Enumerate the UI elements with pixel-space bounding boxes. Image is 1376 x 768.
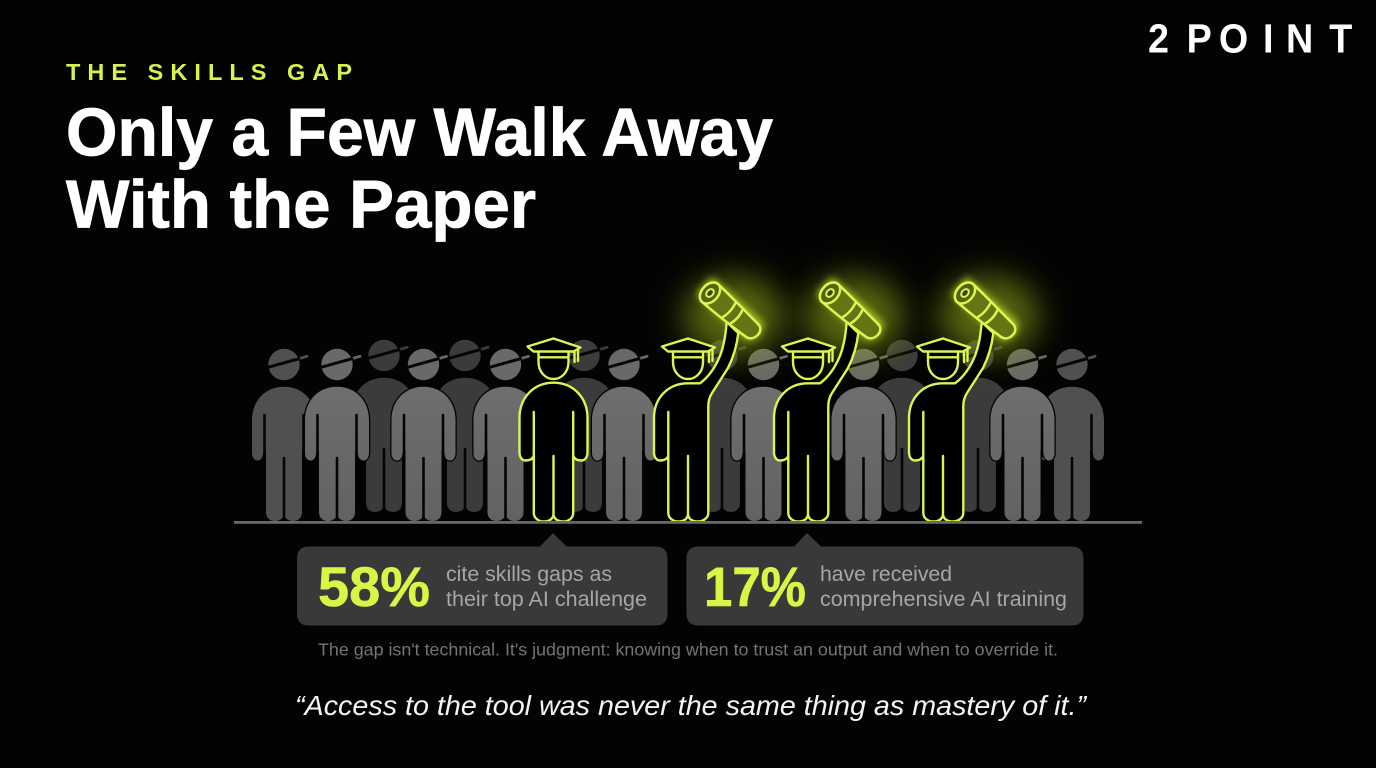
callout: 17 percent: 17% [704,555,806,618]
back row of dim figures [352,340,1010,512]
eyebrow heading: THE SKILLS GAP [66,59,352,85]
callout: 17 percent: have received [820,563,952,586]
title [66,94,773,242]
callout: 58 percent: cite skills gaps as [446,563,612,586]
callout: 58 percent: their top AI challenge [446,588,647,611]
title: With the Paper [66,166,536,242]
callout: 58 percent [297,533,668,626]
neon graduate raising diploma 3 [909,276,1039,522]
neon graduate raising diploma 2 [774,276,904,522]
callout: 17 percent [686,533,1084,626]
callout: 17 percent: comprehensive AI training [820,588,1067,611]
middle row of grey figures [252,349,1104,521]
neon graduate without diploma [520,338,588,522]
ground line [234,521,1142,524]
front row of grey figures [305,349,1054,521]
chart: crowd of graduates [234,276,1142,524]
logo: 2POINT [1148,16,1352,62]
quote: “Access to the tool was never the same thing as mastery of it.” [295,690,1088,721]
explanatory note: The gap isn't technical. It's judgment: knowing when to trust an output and when to override it. [318,640,1058,660]
callout: 58 percent: 58% [318,555,430,618]
title: Only a Few Walk Away [66,94,773,170]
neon graduate raising diploma 1 [654,276,784,522]
